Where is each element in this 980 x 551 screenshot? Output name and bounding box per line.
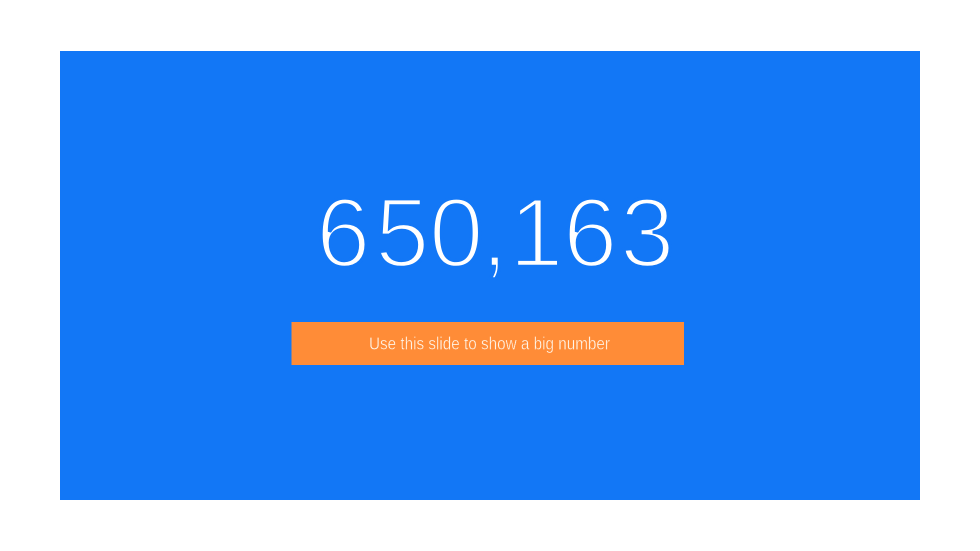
orange bar (292, 322, 684, 365)
caption bar (292, 322, 684, 365)
caption text: Use this slide to show a big number (369, 334, 610, 354)
big number: 650,163 (316, 178, 675, 288)
panel: blue background (60, 51, 920, 500)
